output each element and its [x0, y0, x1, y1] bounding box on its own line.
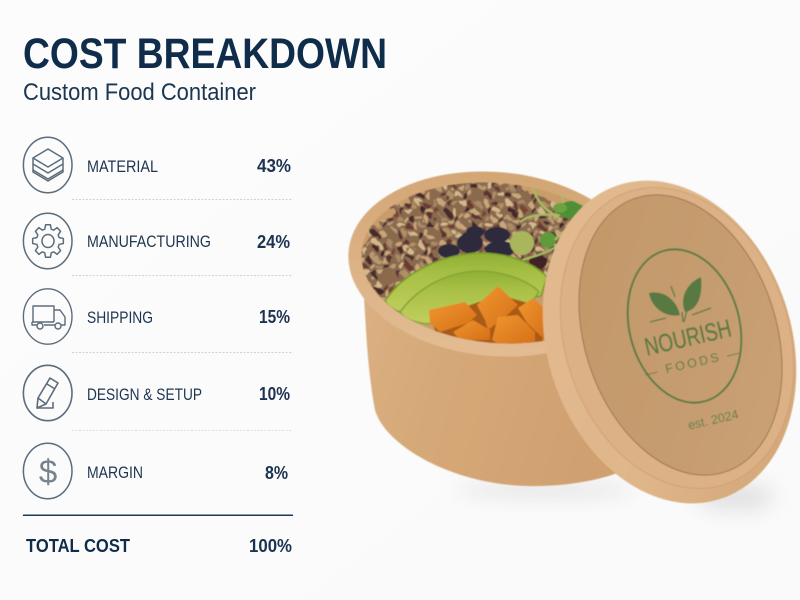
- row: material: [23, 137, 291, 193]
- value: 100%: 100%: [249, 536, 292, 556]
- total row: [26, 536, 292, 556]
- logo ring: [611, 236, 758, 416]
- bowl rim: [341, 160, 649, 368]
- peas and sprouts: [509, 188, 584, 270]
- value: 43%: 43%: [257, 156, 291, 176]
- bowl inner wall: [355, 171, 639, 355]
- logo wordmark: NOURISH: [642, 314, 734, 362]
- cube backing: [433, 298, 544, 344]
- row: manufacturing: [23, 213, 290, 269]
- value: 15%: 15%: [259, 307, 290, 327]
- row: shipping: [23, 289, 290, 344]
- established date: est. 2024: [687, 407, 740, 433]
- icon: layers: [23, 137, 72, 193]
- value: 8%: 8%: [265, 463, 288, 483]
- icon: dollar: [23, 443, 72, 499]
- icon: truck: [23, 289, 72, 344]
- logo subtext: — FOODS —: [643, 345, 743, 381]
- quinoa: [361, 182, 572, 298]
- lid face: [545, 168, 800, 502]
- avocado slices: [385, 253, 547, 324]
- lid outer line: [523, 157, 800, 519]
- value: 10%: 10%: [259, 384, 290, 404]
- lid outer side: [502, 147, 800, 537]
- title: COST BREAKDOWN: [23, 30, 387, 78]
- label: shipping: SHIPPING: [87, 309, 153, 327]
- label: manufacturing: MANUFACTURING: [87, 233, 211, 251]
- label: design and setup: DESIGN & SETUP: [87, 386, 202, 404]
- bowl body: [364, 298, 650, 486]
- subtitle: Custom Food Container: [23, 79, 256, 106]
- label: total cost: TOTAL COST: [26, 536, 130, 556]
- food group: [361, 182, 584, 344]
- row: design and setup: [23, 365, 290, 421]
- row: margin: [23, 443, 288, 499]
- black beans: [438, 226, 515, 258]
- value: 24%: 24%: [257, 232, 290, 252]
- product photo: kraft bowl and lid: [348, 170, 797, 515]
- icon: gear: [23, 213, 72, 269]
- total rule: [23, 514, 293, 516]
- cast shadows: [455, 483, 775, 511]
- sweet potato cubes: [429, 286, 552, 345]
- icon: dollar: $: [39, 453, 57, 490]
- logo leaves: [649, 277, 711, 322]
- label: material: MATERIAL: [87, 158, 158, 176]
- label: margin: MARGIN: [87, 464, 143, 482]
- icon: pencil: [23, 365, 72, 421]
